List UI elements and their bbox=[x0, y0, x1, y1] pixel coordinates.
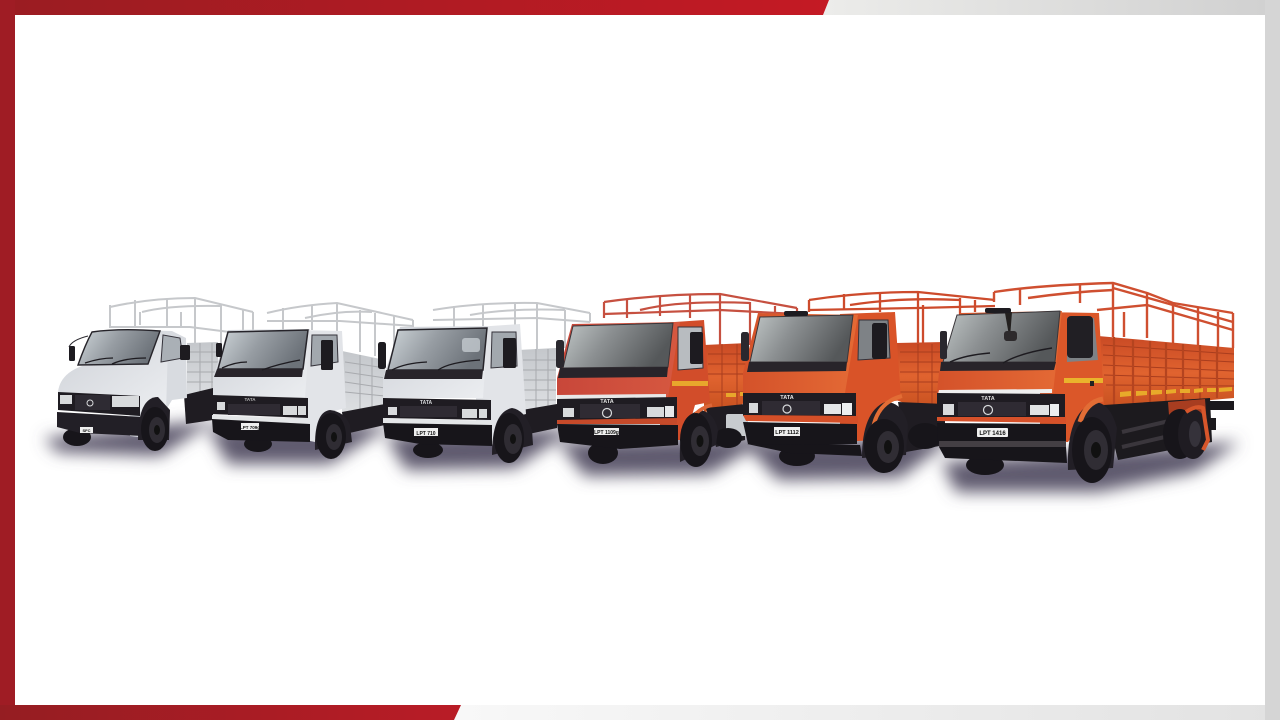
plate: LPT 1109g bbox=[594, 430, 619, 436]
plate: LPT 710 bbox=[416, 431, 436, 437]
plate bbox=[414, 428, 438, 437]
grille bbox=[937, 393, 1065, 417]
plate bbox=[774, 427, 800, 436]
icon: front wheel bbox=[1068, 399, 1117, 483]
plate: LPT 1112 bbox=[775, 430, 799, 436]
brand badge: TATA bbox=[420, 400, 432, 406]
brand badge: TATA bbox=[600, 399, 614, 405]
cab side bbox=[1040, 312, 1104, 442]
ground shadows bbox=[44, 420, 1240, 492]
truck 3: white LPT 710 bbox=[378, 303, 590, 463]
plate bbox=[80, 427, 93, 433]
cargo rack bbox=[994, 283, 1233, 348]
truck 1: white SFC 407 style bbox=[57, 298, 253, 451]
plate: LPT 709g bbox=[240, 425, 260, 430]
truck 4: red LPT 1109g bbox=[556, 294, 797, 467]
chassis bbox=[1104, 398, 1234, 460]
plate: LPT 1416 bbox=[979, 431, 1006, 437]
plate: SFC bbox=[82, 428, 91, 433]
cab front bbox=[937, 308, 1062, 394]
truck 6: orange LPT 1416 bbox=[937, 283, 1234, 483]
icon: rear wheels bbox=[1163, 409, 1208, 459]
cargo bed bbox=[1098, 336, 1234, 410]
truck 2: white LPT 709g bbox=[212, 303, 413, 459]
brand badge: TATA bbox=[981, 396, 995, 402]
brand badge: TATA bbox=[244, 397, 256, 402]
bumper bbox=[937, 417, 1067, 463]
truck 5: orange LPT 1112 bbox=[741, 292, 995, 473]
brand badge: TATA bbox=[780, 395, 794, 401]
